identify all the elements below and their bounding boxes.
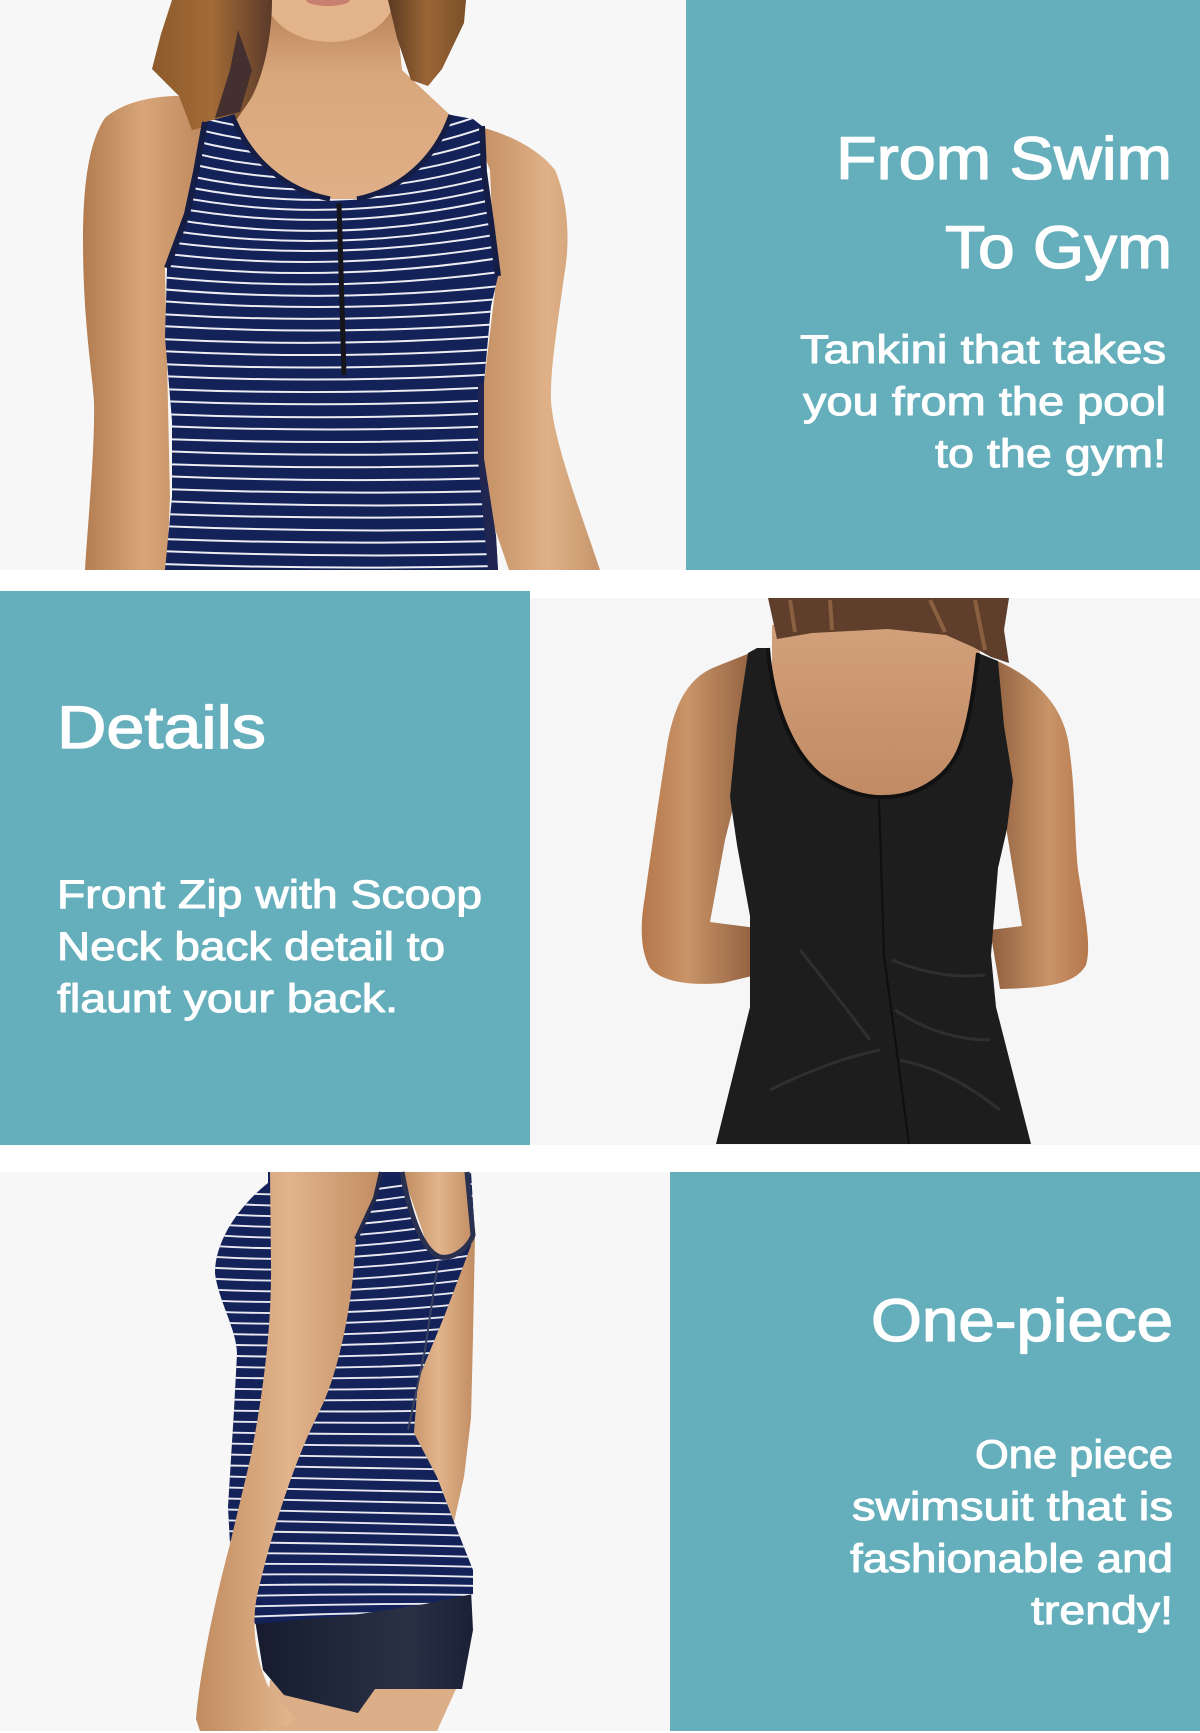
neckline binding	[232, 115, 451, 199]
body text: Tankini that takes	[800, 328, 1166, 372]
right arm	[990, 660, 1088, 989]
heading: One-piece	[871, 1287, 1173, 1354]
striped tank top	[200, 1170, 480, 1624]
front zip	[339, 203, 344, 375]
body text	[800, 328, 1166, 476]
back scoop binding	[402, 1172, 473, 1257]
body text	[57, 873, 482, 1021]
neck and chest	[200, 0, 484, 210]
dark hair strands	[215, 30, 252, 118]
panel: details	[0, 591, 530, 1145]
heading: To Gym	[945, 214, 1172, 281]
heading	[836, 125, 1172, 281]
body text: swimsuit that is	[852, 1485, 1173, 1529]
panel: side view photo	[196, 1172, 476, 1731]
body text: flaunt your back.	[57, 977, 398, 1021]
hair left	[152, 0, 272, 130]
hair	[768, 598, 1009, 663]
striped tank top	[160, 95, 500, 570]
right arm	[470, 118, 600, 570]
upper back skin	[772, 625, 985, 800]
body text: to the gym!	[935, 432, 1166, 476]
body text: One piece	[975, 1433, 1173, 1477]
hair highlights	[790, 600, 985, 650]
body text: fashionable and	[850, 1537, 1173, 1581]
lips	[306, 0, 350, 6]
body text: Neck back detail to	[57, 925, 445, 969]
left arm	[83, 96, 215, 570]
black tank top	[716, 648, 1031, 1144]
scoop binding	[768, 648, 978, 797]
side edge shadow	[478, 383, 498, 570]
back seam	[408, 1262, 438, 1430]
panel: from swim to gym	[686, 0, 1200, 570]
legs	[265, 1680, 460, 1731]
far arm	[402, 1172, 475, 1522]
body text: you from the pool	[803, 380, 1166, 424]
hair right	[388, 0, 466, 86]
body text	[850, 1433, 1173, 1633]
near arm and hand	[196, 1172, 381, 1731]
panel: front view photo	[83, 0, 600, 570]
panel: back view photo	[530, 598, 1200, 1145]
body text: Front Zip with Scoop	[57, 873, 482, 917]
armhole binding	[167, 122, 498, 276]
shorts	[255, 1590, 473, 1713]
heading: Details	[57, 694, 266, 761]
heading: From Swim	[836, 125, 1172, 192]
centre seam	[879, 799, 909, 1144]
left arm	[642, 653, 756, 984]
body text: trendy!	[1031, 1589, 1173, 1633]
fabric wrinkles	[770, 950, 1000, 1110]
armhole binding	[356, 1172, 381, 1239]
panel: one-piece	[670, 1172, 1200, 1731]
face	[264, 0, 396, 42]
